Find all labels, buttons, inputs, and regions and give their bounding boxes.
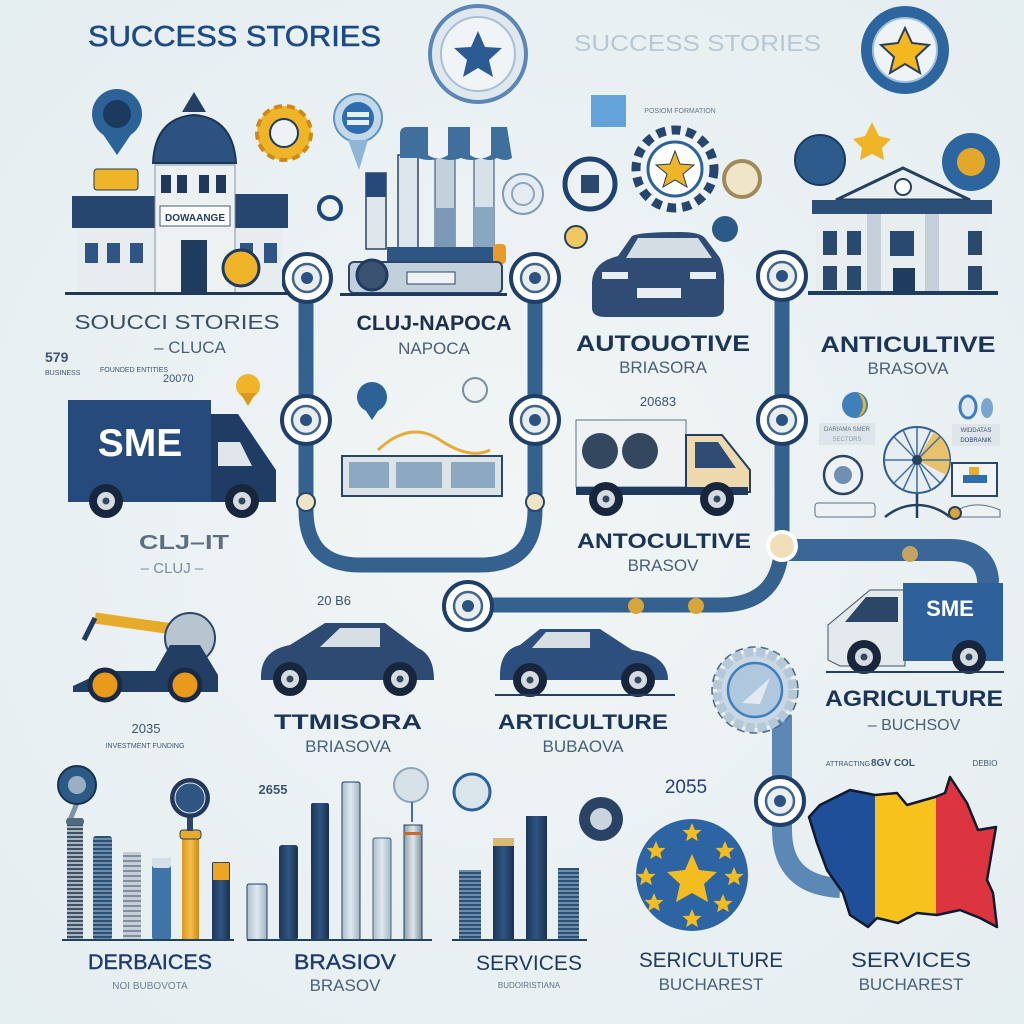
label: automotive: AUTOUOTIVE [576,331,750,356]
year labels row: 8GV COL [871,758,915,769]
label: articulture: ARTICULTURE [498,711,668,734]
label: antocultive: BRASOV [628,556,699,575]
car side 1 [261,623,434,696]
small tag [94,169,138,190]
small figures left [45,349,194,385]
label: agriculture bucharest right: – BUCHSOV [868,717,961,734]
year labels row: 2655 [259,782,287,797]
label: services centre [476,952,582,990]
title: SUCCESS STORIES [88,21,381,53]
label: timisoara [274,711,422,756]
label: clj-it: – CLUJ – [141,560,204,577]
icon: gear yellow left [257,106,311,160]
gear badge [712,647,798,733]
label: anticultive: BRASOVA [868,359,949,378]
route nodes [282,252,918,825]
label: cluj-napoca: CLUJ-NAPOCA [356,312,512,335]
route line [306,290,988,888]
icon: small pin yellow [236,374,260,406]
label: agriculture bucharest right [825,686,1003,734]
SME truck left: SME [98,422,182,465]
secondary faded title: SUCCESS STORIES [574,30,821,56]
map: Romania flag [808,776,998,928]
label: deriaices: NOI BUBOVOTA [112,981,188,992]
wind wheel panel [815,392,1000,519]
dashboard centre [342,378,502,496]
label: services bucharest [851,949,971,994]
label: success stories cluca: – CLUCA [154,338,227,357]
truck with gears [576,420,750,516]
wind wheel panel: SECTORS [833,437,861,443]
classical building [808,168,998,295]
bar chart left [58,766,234,941]
wind wheel panel: DARIAMA SMER [824,427,871,433]
label: timisoara: TTMISORA [274,711,422,734]
small figures left: BUSINESS [45,370,81,377]
label: clj-it [139,532,229,577]
label: antocultive [577,530,751,575]
label: deriaices [88,951,212,992]
car side 2 [495,629,675,697]
label: services bucharest: SERVICES [851,949,971,972]
SME van right [826,583,1004,674]
wind wheel panel: DOBRANIK [960,438,992,444]
year labels row: 2035 [132,721,160,736]
crane vehicle [73,613,218,700]
year labels row: INVESTMENT FUNDING [106,743,184,750]
bar chart centre-left [247,768,432,941]
wind wheel panel: WIDDATAS [961,428,991,434]
year labels row [106,721,997,798]
icon: EU stars circle [636,819,748,931]
label: success stories cluca: SOUCCI STORIES [74,312,280,334]
label: cluj-napoca: NAPOCA [398,339,471,358]
label: services bucharest: BUCHAREST [859,975,963,994]
year label: 20 B6 [317,593,351,608]
label: clj-it: CLJ–IT [139,532,229,554]
SME van right: SME [926,596,974,621]
year labels row: ATTRACTING [826,761,870,768]
label: agriculture bucharest right: AGRICULTURE [825,686,1003,711]
label: timisoara: BRIASOVA [305,737,391,756]
label: brasov: BRASOV [310,976,381,995]
icon: location pin blue [334,94,382,170]
label: antocultive: ANTOCULTIVE [577,530,751,553]
icon: EU star badge centre [430,6,526,102]
label: brasov: BRASIOV [294,951,396,974]
label: cluj-napoca [356,312,512,358]
label: anticultive [820,332,996,378]
SME truck left [68,400,276,518]
icon: pin dollar [92,89,142,155]
icons top right [795,122,1000,191]
year label 2080: 20683 [640,394,676,409]
factory [319,127,543,296]
small figures left: FOUNDED ENTITIES [100,367,168,374]
car front [592,232,724,317]
label: services centre: SERVICES [476,952,582,975]
small figures left: 579 [45,349,69,365]
small figures left: 20070 [163,373,194,385]
year labels row: DEBIO [973,759,997,768]
label: automotive: BRIASORA [619,358,708,377]
label: sericulture [639,949,783,994]
label: automotive [576,331,750,377]
label: sericulture: BUCHAREST [659,975,763,994]
icon: small gears [565,159,760,248]
year labels row: 2055 [665,777,707,798]
bar chart centre [452,774,623,941]
label: sericulture: SERICULTURE [639,949,783,972]
icon: EU star badge right [861,6,949,94]
building: town hall: DOWAANGE [165,213,225,224]
building: town hall [65,92,290,295]
tiny caption: POSIOM FORMATION [644,108,716,115]
label: articulture [498,711,668,756]
label: anticultive: ANTICULTIVE [820,332,996,357]
icon: gear star [636,130,714,208]
label: articulture: BUBAOVA [543,737,624,756]
label: services centre: BUDOIRISTIANA [498,981,561,990]
label: success stories cluca [74,312,280,357]
label: deriaices: DERBAICES [88,951,212,974]
blue tag top centre-right [591,95,626,127]
label: brasov [294,951,396,995]
